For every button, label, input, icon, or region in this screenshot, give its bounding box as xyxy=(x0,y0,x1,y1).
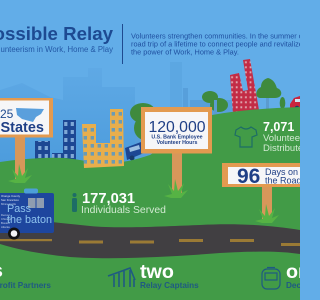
bus: San Francisco xyxy=(1,198,19,202)
captains icon xyxy=(108,268,135,287)
trees xyxy=(202,78,285,116)
small blue van xyxy=(125,142,144,160)
stat: individuals served: Individuals Served xyxy=(81,205,166,216)
intro paragraph: road trip of a lifetime to connect people and revitalize xyxy=(131,40,300,48)
bus: Denver xyxy=(1,213,10,217)
red buildings xyxy=(230,59,259,114)
bus: the baton xyxy=(7,214,52,226)
sign: 120,000 hours xyxy=(141,107,212,198)
bus: Boston xyxy=(1,221,10,225)
sign: 120,000 hours: U.S. Bank Employee xyxy=(151,134,203,140)
bus xyxy=(0,188,54,240)
green hills xyxy=(0,107,300,300)
t-shirt icon xyxy=(235,127,257,147)
intro paragraph: the power of Work, Home & Play. xyxy=(131,48,239,56)
sign: 120,000 hours: Volunteer Hours xyxy=(157,140,197,146)
sign: 25 States xyxy=(0,98,53,183)
person icon xyxy=(72,193,77,212)
sign: 120,000 hours: 120,000 xyxy=(148,119,206,136)
road xyxy=(0,218,300,258)
tree behind sign xyxy=(130,103,156,140)
title xyxy=(0,23,114,54)
stat: relay captains: Relay Captains xyxy=(140,281,199,290)
stat: nonprofit partners xyxy=(0,260,51,290)
bus icon xyxy=(262,268,280,289)
orange buildings xyxy=(82,109,124,168)
distant skyline xyxy=(0,68,135,172)
stat: individuals served: 177,031 xyxy=(82,191,135,207)
intro paragraph xyxy=(131,32,320,56)
sign: 25 States: States xyxy=(0,120,44,136)
bus: Atlanta xyxy=(1,225,10,229)
stat: volunteers: 7,071 xyxy=(263,120,294,134)
stat: relay captains xyxy=(140,261,199,290)
bus: Orange County xyxy=(1,194,21,198)
sign: 96 days: 96 xyxy=(237,165,260,188)
red car xyxy=(290,96,300,110)
bus: Minneapolis xyxy=(1,202,17,206)
stat: volunteers xyxy=(263,120,308,154)
faint right skyline xyxy=(135,62,250,170)
bus: Chicago xyxy=(1,217,12,221)
sign: 25 States: 25 xyxy=(0,107,14,121)
stat: decorated bus xyxy=(286,261,320,290)
sign: 96 days xyxy=(222,163,302,223)
title divider xyxy=(122,24,123,64)
stat: relay captains: two xyxy=(140,261,174,283)
stat: individuals served xyxy=(81,191,166,216)
bus: Pass xyxy=(7,203,32,215)
blue buildings xyxy=(35,120,76,163)
sign: 96 days: Days on xyxy=(265,167,298,177)
